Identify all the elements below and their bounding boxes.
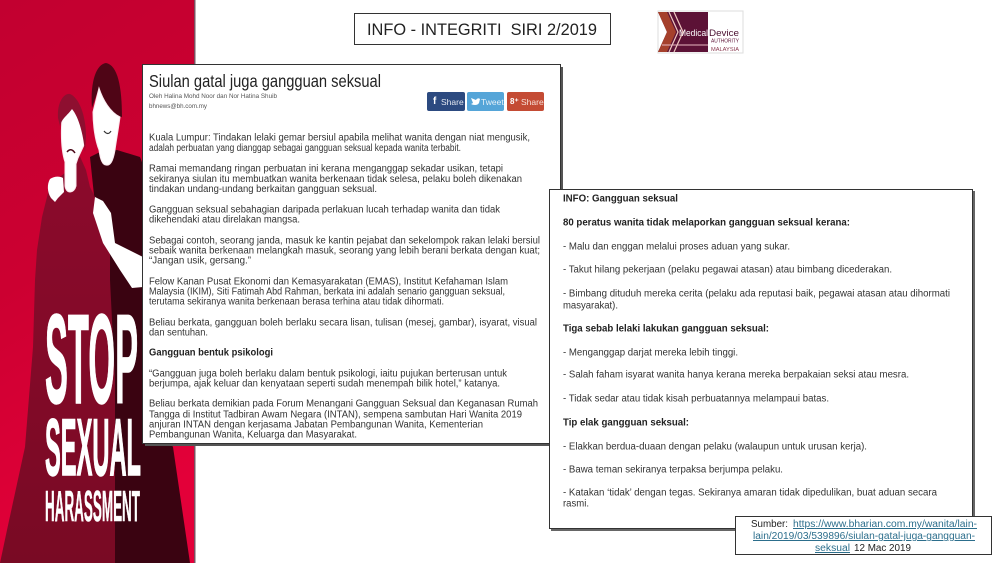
- share buttons: Tweet: [481, 97, 504, 107]
- share buttons: f: [433, 96, 437, 107]
- share buttons: Share: [521, 97, 544, 107]
- article body: Sebagai contoh, seorang janda, masuk ke kantin pejabat dan sekelompok rakan lelaki bersiul: [149, 236, 540, 246]
- article body: Ramai memandang ringan perbuatan ini kerana menganggap sekadar usikan, tetapi: [149, 164, 503, 174]
- source box: lain/2019/03/539896/siulan-gatal-juga-gangguan-: [753, 531, 975, 542]
- byline: bhnews@bh.com.my: [149, 103, 208, 110]
- article body: dan sentuhan.: [149, 328, 208, 338]
- article body: Gangguan bentuk psikologi: [149, 348, 273, 358]
- article body: Beliau berkata, gangguan boleh berlaku secara lisan, tulisan (mesej, gambar), isyarat, visual: [149, 318, 537, 328]
- text: STOP: [45, 288, 138, 430]
- article body: Tangga di Institut Tadbiran Awam Negara (INTAN), sempena sambutan Hari Wanita 2019: [149, 410, 522, 420]
- panel: news article: [142, 64, 563, 446]
- section: tips: - Elakkan berdua-duaan dengan pelaku (walaupun untuk urusan kerja).: [563, 442, 867, 452]
- source box: 12 Mac 2019: [854, 543, 911, 554]
- logo: Medical Device Authority Malaysia: MALAYSIA: [711, 47, 739, 53]
- byline: [149, 93, 277, 110]
- section: three reasons: - Menganggap darjat mereka lebih tinggi.: [563, 348, 738, 358]
- title box: [354, 14, 610, 44]
- article body: Felow Kanan Pusat Ekonomi dan Kemasyarakatan (EMAS), Institut Kefahaman Islam: [149, 276, 508, 288]
- article body: [149, 132, 540, 440]
- section: three reasons: [563, 324, 909, 404]
- section: why women do not report: [563, 218, 950, 312]
- article body: sekiranya siulan itu membuatkan wanita berkenaan tidak selesa, pelaku boleh dikenakan: [149, 174, 522, 185]
- right arm: [93, 197, 143, 288]
- left hair: [58, 94, 86, 152]
- section: why women do not report: masyarakat).: [563, 300, 618, 312]
- section: three reasons: - Salah faham isyarat wanita hanya kerana mereka berpakaian seksi atau mesra.: [563, 370, 909, 380]
- source box: [736, 516, 992, 554]
- logo: Medical Device Authority Malaysia: Medical: [679, 28, 708, 39]
- section: why women do not report: 80 peratus wanita tidak melaporkan gangguan seksual kerana:: [563, 218, 850, 228]
- info heading: INFO: Gangguan seksual: [563, 194, 678, 204]
- article body: Kuala Lumpur: Tindakan lelaki gemar bersiul apabila melihat wanita dengan niat mengusik,: [149, 132, 530, 144]
- article body: tindakan undang-undang berkaitan gangguan seksual.: [149, 184, 377, 195]
- article body: dikehendaki atau direlakan mangsa.: [149, 214, 300, 226]
- left head: [61, 108, 84, 192]
- section: tips: rasmi.: [563, 498, 589, 510]
- section: three reasons: Tiga sebab lelaki lakukan gangguan seksual:: [563, 324, 769, 334]
- article body: adalah perbuatan yang dianggap sebagai gangguan seksual kepada wanita terbabit.: [149, 143, 461, 154]
- section: why women do not report: - Bimbang dituduh mereka cerita (pelaku ada reputasi baik, pegawai atasan atau dihormati: [563, 288, 950, 300]
- share buttons: Share: [441, 97, 464, 107]
- article headline: Siulan gatal juga gangguan seksual: [149, 71, 381, 91]
- article body: berjumpa, ajak keluar dan kenyataan seperti sudah menempah bilik hotel,” katanya.: [149, 378, 500, 390]
- left hand: [48, 177, 64, 202]
- article body: Pembangunan Wanita, Keluarga dan Masyarakat.: [149, 430, 357, 440]
- article body: Beliau berkata demikian pada Forum Menangani Gangguan Seksual dan Keganasan Rumah: [149, 398, 538, 410]
- text: SEXUAL: [45, 403, 141, 493]
- panel: stop sexual harassment poster: [0, 0, 196, 563]
- section: tips: [563, 418, 937, 510]
- illustration: couple figures: [0, 63, 190, 563]
- panel: info box: [550, 190, 975, 531]
- share buttons: [427, 92, 544, 111]
- right hair: [92, 63, 122, 117]
- section: why women do not report: - Malu dan enggan melalui proses aduan yang sukar.: [563, 242, 790, 252]
- section: tips: Tip elak gangguan seksual:: [563, 418, 689, 428]
- section: tips: - Katakan ‘tidak’ dengan tegas. Sekiranya amaran tidak dipedulikan, buat aduan secara: [563, 488, 937, 498]
- logo: Medical Device Authority Malaysia: AUTHORITY: [711, 38, 739, 44]
- share buttons: 8⁺: [510, 97, 519, 106]
- article body: terutama sekiranya wanita berkenaan berasa terhina atau tidak dihormati.: [149, 296, 444, 308]
- byline: Oleh Halina Mohd Noor dan Nor Hatina Shuib: [149, 93, 277, 100]
- source box: https://www.bharian.com.my/wanita/lain-: [793, 519, 977, 530]
- article body: “Jangan usik, gersang.”: [149, 256, 251, 266]
- title box: INFO - INTEGRITI SIRI 2/2019: [367, 21, 597, 39]
- section: tips: - Bawa teman sekiranya terpaksa berjumpa pelaku.: [563, 464, 783, 476]
- article body: sebaik wanita berkenaan melangkah masuk, seorang yang lebih berani berkata dengan kuat;: [149, 246, 540, 256]
- logo: Medical Device Authority Malaysia: [658, 11, 743, 53]
- article body: “Gangguan juga boleh berlaku dalam bentuk psikologi, iaitu pujukan berterusan untuk: [149, 368, 508, 380]
- section: three reasons: - Tidak sedar atau tidak kisah perbuatannya melampaui batas.: [563, 394, 829, 404]
- article body: Malaysia (IKIM), Siti Fatimah Abd Rahman, berkata ini adalah senario gangguan seksual,: [149, 286, 505, 298]
- source box: Sumber:: [751, 519, 788, 530]
- text: HARASSMENT: [45, 482, 140, 531]
- source box: seksual: [815, 543, 850, 554]
- article body: anjuran INTAN dengan kerjasama Jabatan Pembangunan Wanita, Kementerian: [149, 420, 483, 430]
- article body: Gangguan seksual sebahagian daripada perlakuan lucah terhadap wanita dan tidak: [149, 204, 501, 216]
- section: why women do not report: - Takut hilang pekerjaan (pelaku pegawai atasan) atau bimbang dicederakan.: [563, 264, 892, 276]
- right head: [93, 88, 120, 165]
- logo: Medical Device Authority Malaysia: Device: [709, 28, 739, 39]
